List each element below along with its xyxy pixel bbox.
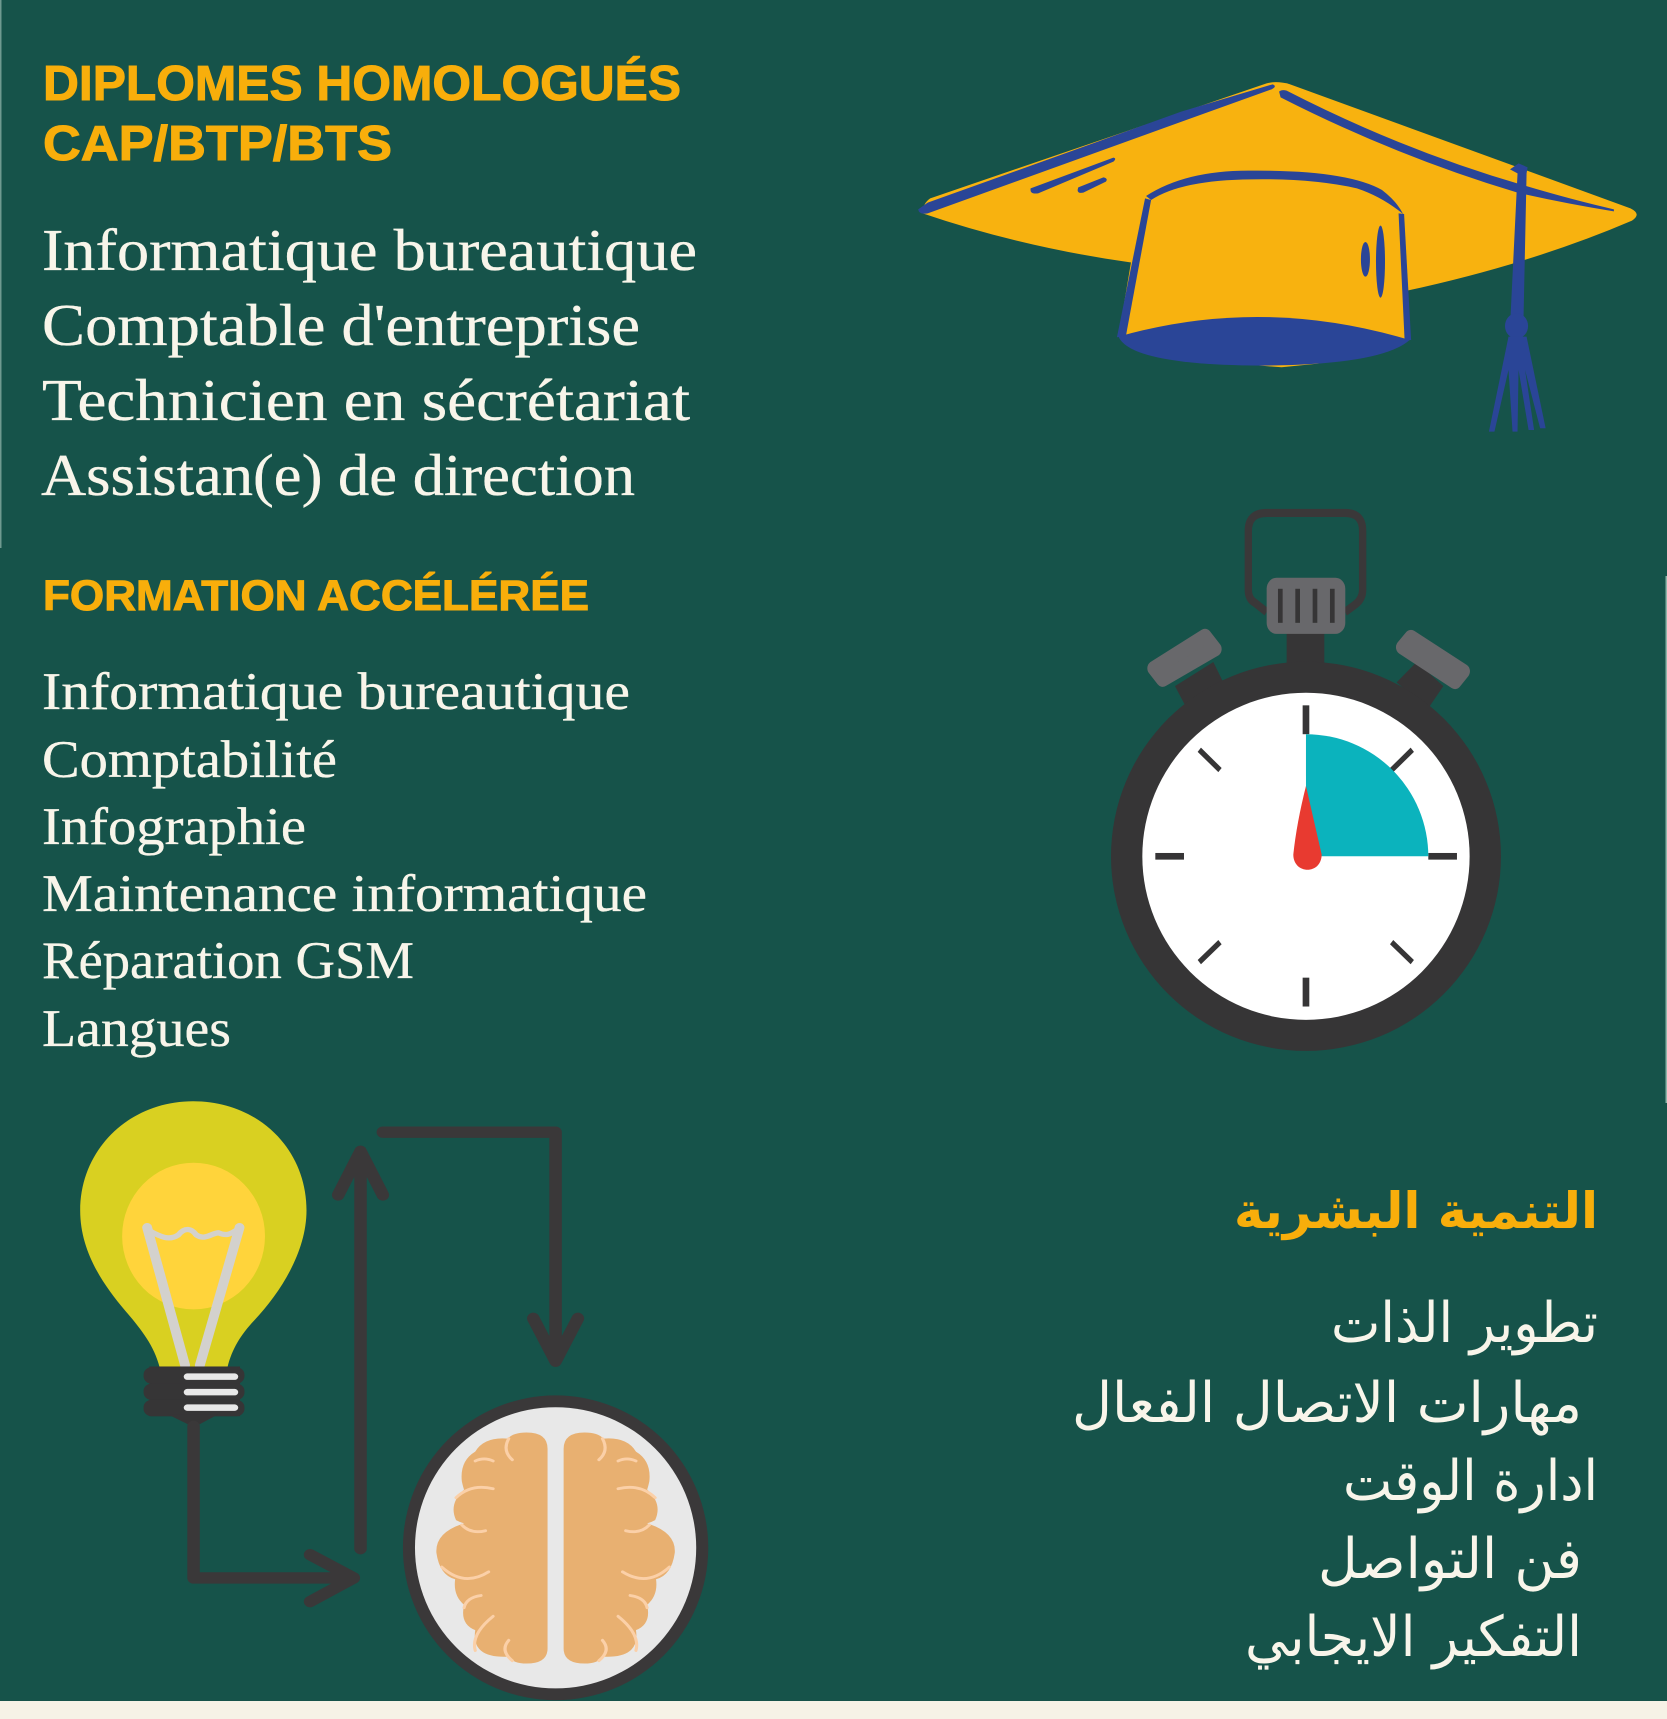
text block: accelerated courses list: Réparation GSM [42,932,414,990]
text block: arabic list: مهارات الاتصال الفعال [1072,1371,1582,1436]
text block: arabic list: ادارة الوقت [1343,1449,1598,1514]
heading: diplomes homologues: CAP/BTP/BTS [43,117,392,171]
text block: diploma list: Technicien en sécrétariat [42,367,691,433]
text block: arabic list: التفكير الايجابي [1245,1605,1582,1670]
icon: light bulb, arrows and brain [80,1101,708,1700]
text block: diploma list: Informatique bureautique [42,217,697,283]
arrow: bulb to up arrow [194,1426,354,1602]
icon: light bulb [80,1101,307,1427]
text block: accelerated courses list: Maintenance informatique [42,865,647,923]
text block: accelerated courses list: Informatique bureautique [42,663,630,721]
heading: formation acceleree: FORMATION ACCÉLÉRÉE [43,572,589,620]
icon: graduation cap [918,82,1637,432]
icon: stopwatch [1111,513,1501,1051]
heading: diplomes homologues [43,57,681,171]
text block: accelerated courses list [42,663,647,1058]
text block: arabic list: تطوير الذات [1331,1291,1598,1356]
bottom cream strip [0,1701,1667,1719]
text block: diploma list: Assistan(e) de direction [41,442,635,508]
arrow: upward [338,1151,383,1549]
text block: arabic list [1072,1291,1598,1670]
heading: diplomes homologues: DIPLOMES HOMOLOGUÉS [43,57,681,111]
text block: accelerated courses list: Comptabilité [42,731,337,789]
icon: brain [403,1395,708,1700]
text block: accelerated courses list: Infographie [42,798,306,856]
text block: accelerated courses list: Langues [42,1000,231,1058]
text block: arabic list: فن التواصل [1318,1527,1582,1592]
text block: diploma list: Comptable d'entreprise [42,292,640,358]
text block: diploma list [41,217,697,508]
heading: arabic human development: التنمية البشرية [1234,1182,1598,1241]
arrow: down to brain [383,1132,578,1361]
